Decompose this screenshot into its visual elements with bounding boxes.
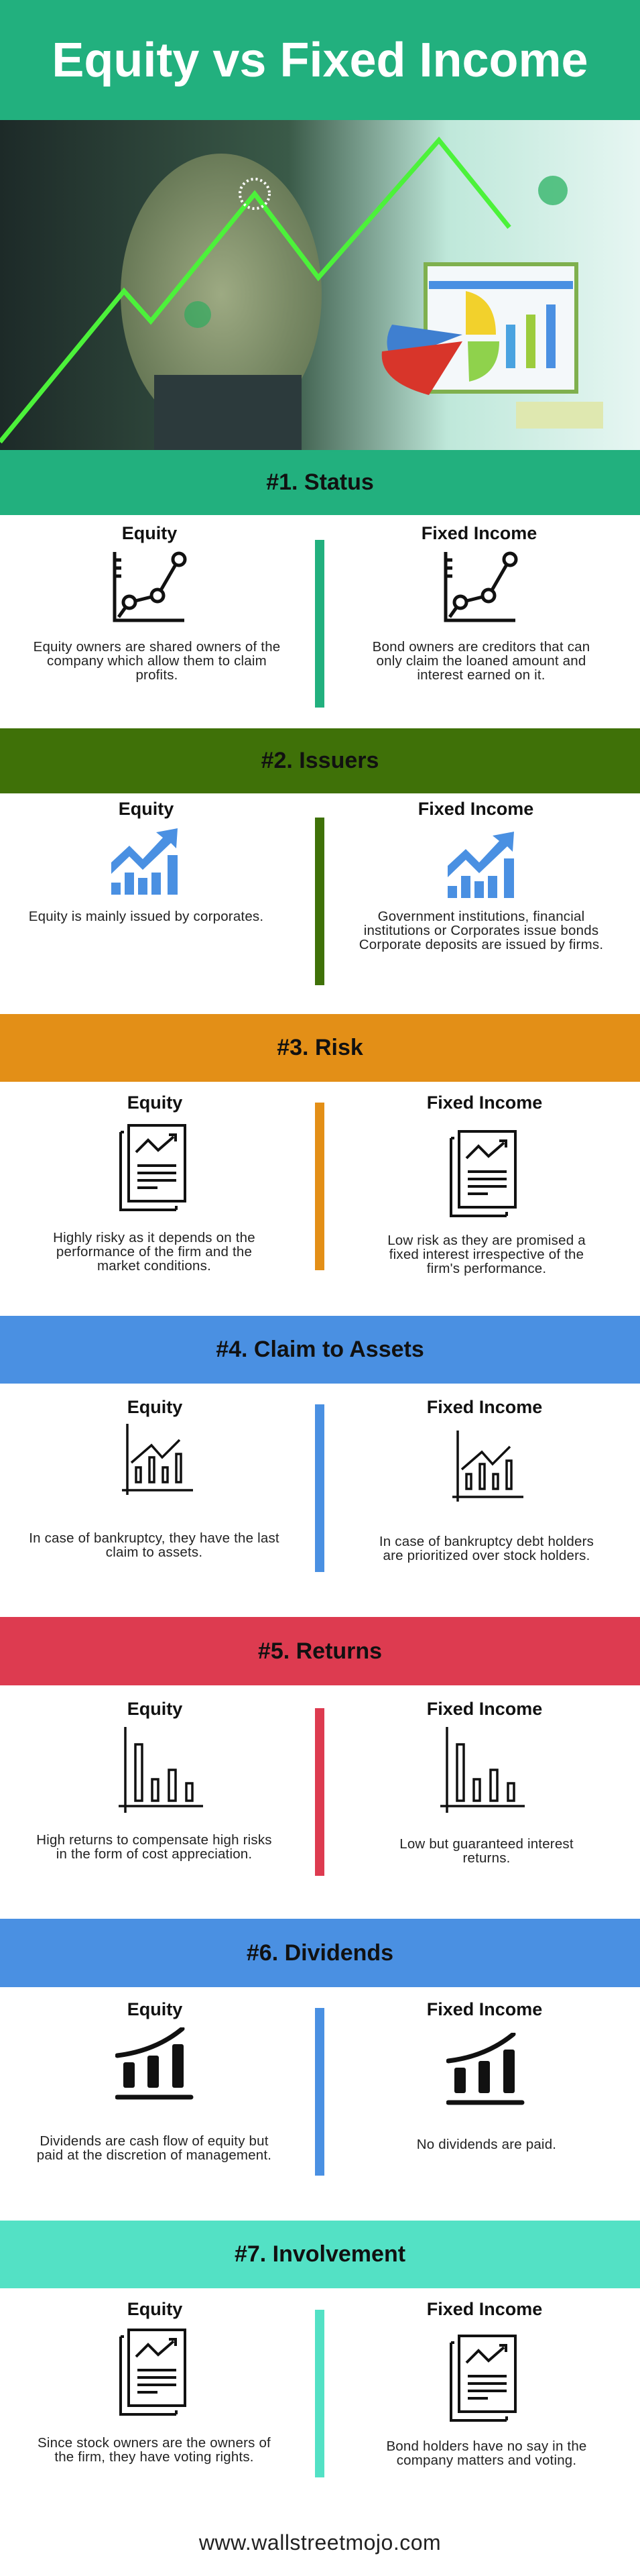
panel: dividends bbox=[37, 1999, 556, 2176]
icon: declining bars bbox=[119, 1727, 203, 1813]
fixed income text: Low risk as they are promised a bbox=[387, 1233, 586, 1248]
header: #5. Returns bbox=[0, 1617, 640, 1685]
fixed income text bbox=[379, 1534, 594, 1563]
equity text: claim to assets. bbox=[106, 1545, 202, 1560]
header: #6. Dividends bbox=[0, 1919, 640, 1987]
divider bbox=[315, 2008, 324, 2176]
divider bbox=[315, 540, 324, 708]
fixed income text bbox=[387, 1233, 586, 1276]
fixed income text: institutions or Corporates issue bonds bbox=[364, 923, 598, 938]
equity text: paid at the discretion of management. bbox=[37, 2147, 271, 2163]
fixed income heading: Fixed Income bbox=[427, 1093, 542, 1113]
fixed income text: are prioritized over stock holders. bbox=[383, 1548, 590, 1563]
panel: claim to assets bbox=[29, 1397, 594, 1572]
fixed income heading: Fixed Income bbox=[418, 799, 533, 819]
panel: returns bbox=[36, 1699, 574, 1876]
equity text: In case of bankruptcy, they have the last bbox=[29, 1530, 279, 1546]
header: #2. Issuers: #2. Issuers bbox=[261, 748, 379, 773]
divider bbox=[315, 1708, 324, 1876]
fixed income text: company matters and voting. bbox=[397, 2453, 576, 2468]
fixed income text: No dividends are paid. bbox=[417, 2137, 556, 2152]
title banner: Equity vs Fixed Income bbox=[52, 34, 588, 87]
fixed income text: Bond holders have no say in the bbox=[386, 2439, 587, 2454]
icon: blue growth chart bbox=[111, 828, 178, 895]
divider bbox=[315, 2310, 324, 2477]
divider bbox=[315, 1404, 324, 1572]
header: #5. Returns: #5. Returns bbox=[258, 1638, 382, 1663]
icon: blue growth chart bbox=[448, 832, 514, 898]
icon: report document bbox=[119, 1124, 186, 1211]
icon: bar chart with trend bbox=[122, 1424, 193, 1495]
divider bbox=[315, 1103, 324, 1270]
equity text: Highly risky as it depends on the bbox=[53, 1230, 255, 1245]
fixed income text bbox=[399, 1836, 574, 1866]
divider bbox=[315, 818, 324, 985]
fixed income heading: Fixed Income bbox=[427, 1999, 542, 2019]
fixed income heading: Fixed Income bbox=[427, 1397, 542, 1417]
panel: status bbox=[34, 523, 590, 708]
icon: bold bar chart with curve bbox=[446, 2033, 524, 2105]
icon: declining bars bbox=[440, 1727, 525, 1813]
equity heading: Equity bbox=[127, 1093, 182, 1113]
equity text: performance of the firm and the bbox=[56, 1244, 252, 1259]
icon: line chart bbox=[113, 551, 186, 622]
icon: report document bbox=[450, 2335, 517, 2422]
fixed income text: returns. bbox=[462, 1850, 511, 1866]
fixed income text: interest earned on it. bbox=[417, 667, 546, 683]
title banner bbox=[0, 0, 640, 120]
header: #2. Issuers bbox=[0, 728, 640, 793]
header: #6. Dividends: #6. Dividends bbox=[247, 1940, 393, 1965]
equity text: profits. bbox=[135, 667, 178, 683]
fixed income text bbox=[386, 2439, 587, 2468]
header: #4. Claim to Assets: #4. Claim to Assets bbox=[216, 1337, 424, 1362]
panel: issuers bbox=[29, 799, 603, 985]
header: #7. Involvement bbox=[0, 2221, 640, 2288]
icon: bold bar chart with curve bbox=[115, 2027, 193, 2099]
fixed income heading: Fixed Income bbox=[422, 523, 537, 543]
equity text: High returns to compensate high risks bbox=[36, 1832, 272, 1848]
fixed income text: fixed interest irrespective of the bbox=[389, 1247, 584, 1262]
fixed income text bbox=[373, 639, 590, 683]
panel: risk bbox=[53, 1093, 586, 1276]
fixed income text: only claim the loaned amount and bbox=[377, 653, 586, 669]
equity text: market conditions. bbox=[97, 1258, 211, 1274]
equity text bbox=[36, 1832, 272, 1862]
fixed income text: firm's performance. bbox=[427, 1261, 546, 1276]
icon: report document bbox=[450, 1130, 517, 1217]
fixed income text: Low but guaranteed interest bbox=[399, 1836, 574, 1852]
equity heading: Equity bbox=[127, 2299, 182, 2319]
footer: website: www.wallstreetmojo.com bbox=[199, 2530, 441, 2555]
equity heading: Equity bbox=[127, 1699, 182, 1719]
equity text: Equity is mainly issued by corporates. bbox=[29, 909, 263, 924]
equity heading: Equity bbox=[127, 1397, 182, 1417]
equity text: company which allow them to claim bbox=[47, 653, 267, 669]
header: #4. Claim to Assets bbox=[0, 1316, 640, 1384]
equity heading: Equity bbox=[122, 523, 177, 543]
equity text: Since stock owners are the owners of bbox=[38, 2435, 271, 2451]
header: #1. Status bbox=[0, 450, 640, 515]
equity heading: Equity bbox=[127, 1999, 182, 2019]
equity text: Equity owners are shared owners of the bbox=[34, 639, 280, 655]
header: #3. Risk bbox=[0, 1014, 640, 1082]
icon: line chart bbox=[444, 551, 517, 622]
equity text bbox=[29, 1530, 279, 1560]
fixed income text: Bond owners are creditors that can bbox=[373, 639, 590, 655]
icon: bar chart with trend bbox=[452, 1431, 523, 1502]
equity text: Dividends are cash flow of equity but bbox=[40, 2133, 269, 2149]
header: #3. Risk: #3. Risk bbox=[277, 1035, 363, 1060]
equity text bbox=[53, 1230, 255, 1274]
equity text bbox=[34, 639, 280, 683]
equity text: in the form of cost appreciation. bbox=[56, 1846, 252, 1862]
equity heading: Equity bbox=[119, 799, 174, 819]
fixed income text: Corporate deposits are issued by firms. bbox=[359, 937, 603, 952]
hero image: hand drawing growth chart bbox=[0, 120, 640, 450]
fixed income text: In case of bankruptcy debt holders bbox=[379, 1534, 594, 1549]
header: #1. Status: #1. Status bbox=[266, 469, 374, 495]
equity text bbox=[38, 2435, 271, 2465]
header: #7. Involvement: #7. Involvement bbox=[235, 2241, 405, 2267]
fixed income heading: Fixed Income bbox=[427, 2299, 542, 2319]
equity text bbox=[37, 2133, 271, 2163]
icon: report document bbox=[119, 2329, 186, 2416]
fixed income text bbox=[359, 909, 603, 952]
fixed income heading: Fixed Income bbox=[427, 1699, 542, 1719]
fixed income text: Government institutions, financial bbox=[378, 909, 584, 924]
panel: involvement bbox=[38, 2299, 587, 2477]
equity text: the firm, they have voting rights. bbox=[54, 2449, 254, 2465]
